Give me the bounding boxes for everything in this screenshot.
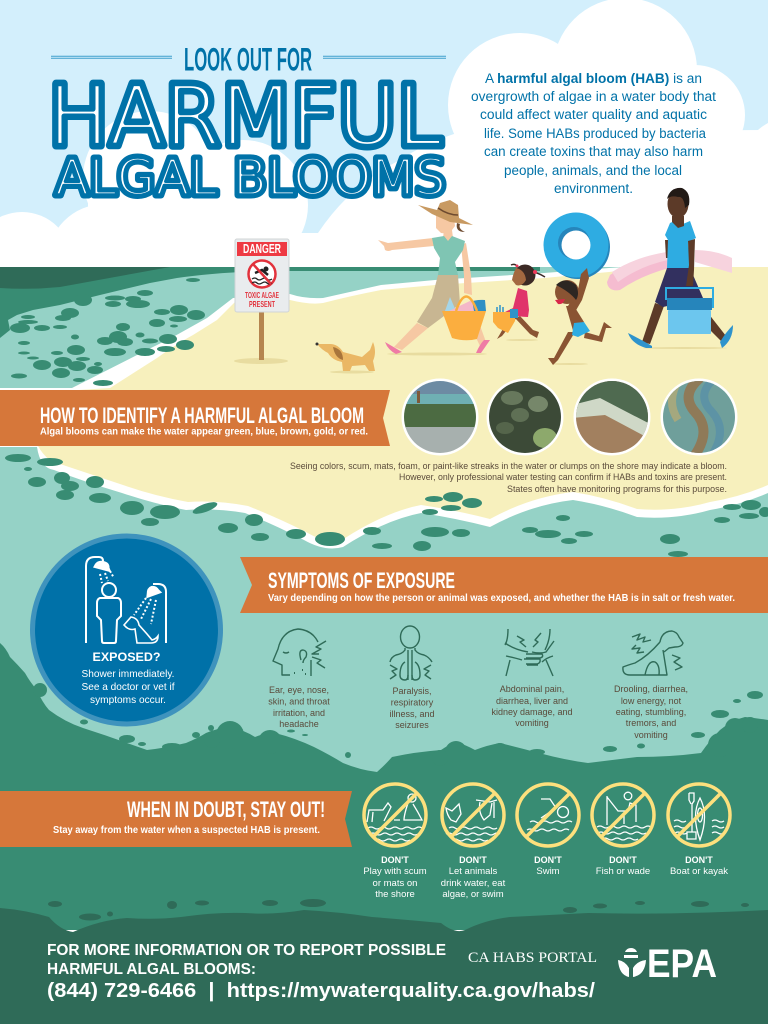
symptom: sick dog: Drooling, diarrhea, — [614, 684, 688, 694]
intro text: environment. — [554, 181, 633, 196]
symptom: sick dog: vomiting — [634, 730, 668, 740]
symptom: lungs: seizures — [395, 720, 429, 730]
symptom: lungs: respiratory — [391, 698, 434, 708]
don't: swim — [517, 784, 579, 877]
banner: how to identify: Algal blooms can make the water appear green, blue, brown, gold, or red. — [40, 426, 368, 438]
water and sand background — [0, 266, 768, 777]
footer contact text: (844) 729-6466 | https://mywaterquality.ca.gov/habs/ — [47, 980, 595, 1002]
identify description: States often have monitoring programs for this purpose. — [507, 484, 727, 495]
banner: when in doubt: WHEN IN DOUBT, STAY OUT! — [127, 797, 325, 822]
dog — [316, 342, 375, 374]
photo: green scum on beach — [400, 378, 480, 456]
don't: play with scum: or mats on — [373, 878, 417, 889]
footer contact text — [47, 942, 595, 1002]
exposed circle panel: Shower immediately. — [82, 669, 174, 680]
don't: boat or kayak: DON'T — [685, 855, 713, 865]
arm and legs — [378, 230, 486, 350]
don't: let animals drink: DON'T — [459, 855, 487, 865]
EPA logo: EPA — [647, 942, 717, 986]
don't: boat or kayak — [668, 784, 730, 877]
don't: play with scum: the shore — [375, 889, 415, 900]
girl with bucket — [493, 264, 545, 341]
boy with swim ring — [544, 212, 612, 365]
icon: showers with person and dog — [86, 557, 166, 643]
symptom: sick dog: low energy, not — [621, 696, 682, 706]
danger sign — [234, 239, 289, 364]
swim ring — [544, 212, 610, 279]
symptom: sick dog: eating, stumbling, — [616, 707, 686, 717]
man with cooler and noodle — [607, 188, 733, 349]
don't: fish or wade — [592, 784, 654, 877]
symptom: abdominal pain: diarrhea, liver and — [496, 696, 568, 706]
don't: fish or wade: DON'T — [609, 855, 637, 865]
symptom: abdominal pain: kidney damage, and — [491, 707, 573, 717]
pool noodle — [607, 252, 669, 290]
banner: symptoms of exposure — [240, 557, 768, 613]
icon: abdomen — [505, 629, 554, 676]
symptom: abdominal pain — [491, 629, 573, 728]
symptom: head: headache — [279, 719, 319, 729]
don't: boat or kayak: Boat or kayak — [670, 866, 728, 877]
photo: foam on shore — [572, 378, 652, 458]
don't: let animals drink: Let animals — [449, 866, 498, 877]
don't: play with scum — [363, 784, 427, 900]
title: algal blooms: ALGAL BLOOMS — [55, 149, 446, 208]
symptom: head: irritation, and — [273, 708, 325, 718]
footer background — [0, 899, 768, 1024]
icon: body and lungs — [390, 626, 432, 680]
banner: symptoms of exposure: SYMPTOMS OF EXPOSURE — [268, 568, 455, 593]
symptom: sick dog: tremors, and — [626, 718, 676, 728]
title: harmful: HARMFUL — [48, 68, 442, 166]
beach bag — [442, 296, 486, 340]
don't: let animals drink — [441, 784, 506, 900]
symptom: lungs: illness, and — [389, 709, 435, 719]
intro text: people, animals, and the local — [504, 163, 682, 178]
identify description — [290, 461, 727, 495]
identify description: Seeing colors, scum, mats, foam, or paint-like streaks in the water or clumps on the shore may indicate a bloom. — [290, 461, 727, 472]
title — [48, 42, 446, 208]
CA HABS portal label: CA HABS PORTAL — [468, 950, 597, 966]
exposed circle panel: EXPOSED? — [92, 652, 160, 664]
don't: let animals drink: drink water, eat — [441, 878, 506, 889]
intro text: life. Some HABs produced by bacteria — [484, 126, 706, 141]
icon: person fishing crossed out — [592, 784, 654, 846]
don't: fish or wade: Fish or wade — [596, 866, 650, 877]
photo: paint-like streaks — [659, 378, 739, 458]
danger sign: DANGER — [243, 241, 281, 256]
symptom: head — [268, 629, 330, 729]
icon: dog — [623, 631, 683, 675]
don't: play with scum: DON'T — [381, 855, 409, 865]
symptom: lungs — [389, 626, 435, 730]
intro text: overgrowth of algae in a water body that — [471, 89, 716, 104]
icon: animals drinking crossed out — [442, 784, 504, 846]
don't: play with scum: Play with scum — [363, 866, 427, 877]
photo: floating mats — [485, 378, 565, 458]
title: harmful: HARMFUL — [48, 68, 442, 166]
intro text: could affect water quality and aquatic — [480, 107, 707, 122]
don't: swim: DON'T — [534, 855, 562, 865]
EPA logo — [618, 942, 717, 986]
symptom: abdominal pain: vomiting — [515, 718, 549, 728]
symptom: head: skin, and throat — [268, 696, 330, 706]
symptom: abdominal pain: Abdominal pain, — [500, 684, 564, 694]
symptom: sick dog — [614, 631, 688, 740]
icon: kayak crossed out — [668, 784, 730, 846]
intro text — [471, 71, 716, 196]
symptom: lungs: Paralysis, — [392, 686, 432, 696]
green shoreline foreground — [0, 643, 768, 930]
danger sign: PRESENT — [249, 299, 276, 309]
don't: swim: Swim — [536, 866, 560, 877]
identify description: However, only professional water testing can confirm if HABs and toxins are present. — [399, 472, 727, 483]
exposed circle panel — [30, 534, 223, 726]
symptom: head: Ear, eye, nose, — [269, 685, 329, 695]
intro text: A harmful algal bloom (HAB) is an — [485, 71, 702, 86]
banner: symptoms of exposure: Vary depending on how the person or animal was exposed, and whether the HAB is in salt or fresh water. — [268, 593, 735, 604]
cooler — [666, 288, 713, 334]
banner: when in doubt — [0, 791, 352, 847]
banner: how to identify — [0, 390, 390, 446]
footer contact text: FOR MORE INFORMATION OR TO REPORT POSSIBLE — [47, 942, 446, 959]
don't: let animals drink: algae, or swim — [442, 889, 504, 900]
banner: how to identify: HOW TO IDENTIFY A HARMFUL ALGAL BLOOM — [40, 403, 364, 428]
icon: dog and child crossed out — [364, 784, 426, 846]
sky and clouds — [0, 0, 768, 320]
banner: when in doubt: Stay away from the water when a suspected HAB is present. — [53, 825, 320, 836]
algae blobs upper shore — [10, 278, 205, 386]
icon: swimmer crossed out — [517, 784, 579, 846]
icon: head — [273, 629, 326, 676]
exposed circle panel: symptoms occur. — [90, 695, 166, 706]
exposed circle panel: See a doctor or vet if — [82, 682, 175, 693]
intro text: can create toxins that may also harm — [484, 144, 703, 159]
danger sign: TOXIC ALGAE — [245, 290, 279, 300]
algae blobs lower shore — [5, 454, 768, 557]
footer contact text: HARMFUL ALGAL BLOOMS: — [47, 961, 256, 978]
title: look out for: LOOK OUT FOR — [184, 42, 312, 78]
woman with bag — [378, 200, 490, 356]
title: algal blooms: ALGAL BLOOMS — [55, 149, 446, 208]
